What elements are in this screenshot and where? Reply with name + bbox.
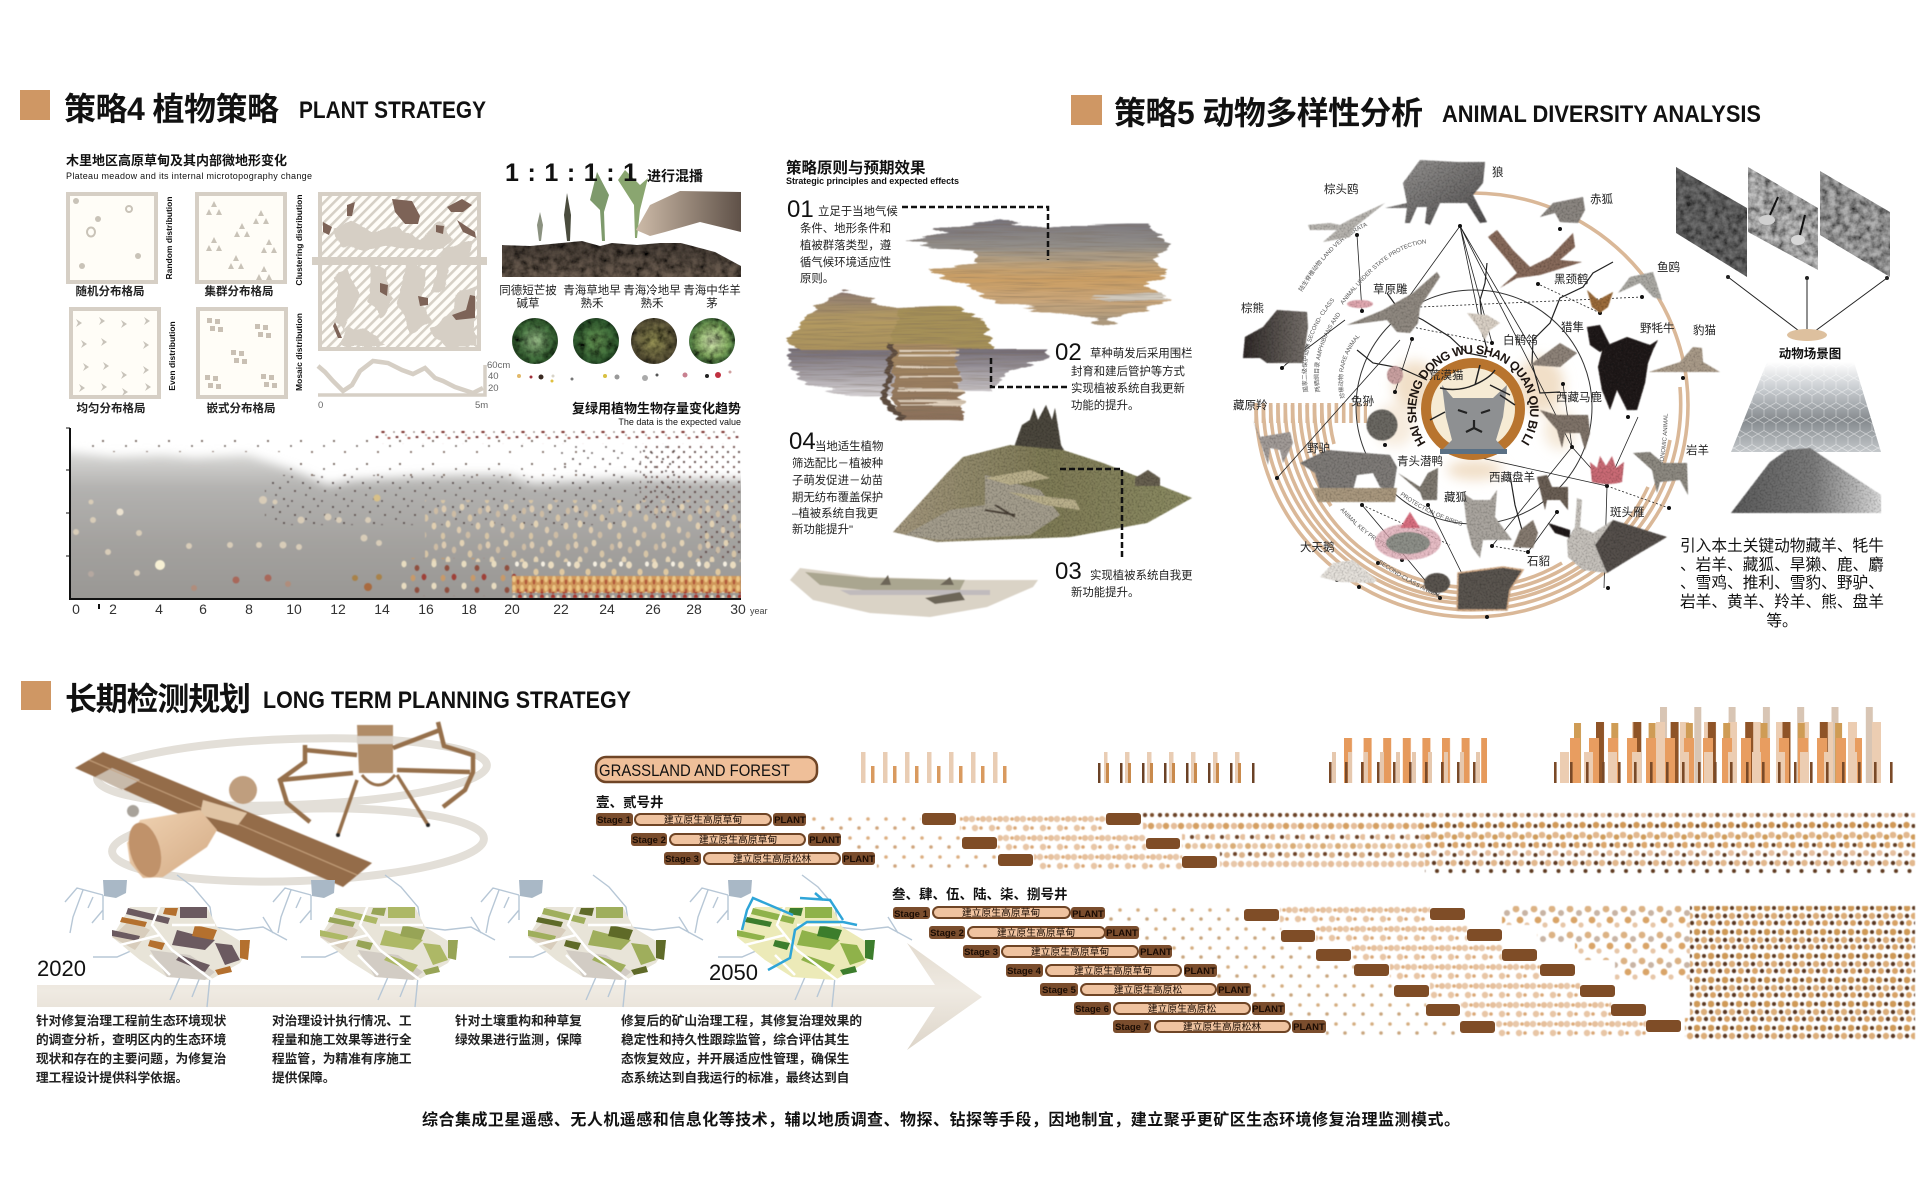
x axis labels: 2 bbox=[109, 601, 117, 617]
timeline arrow bbox=[37, 943, 982, 1050]
animal: baer's pochard bbox=[1398, 468, 1438, 500]
item 04: 期无纺布覆盖保护 bbox=[792, 490, 883, 504]
vertical labels: Even distribution bbox=[167, 321, 177, 391]
arc captions: ECONOMIC ANIMAL bbox=[1660, 414, 1668, 464]
arc captions: 珍稀动物 RARE ANIMAL bbox=[1338, 335, 1360, 399]
animal: saker falcon bbox=[1530, 343, 1577, 367]
stage 7 row bbox=[1113, 1020, 1681, 1033]
animal: argali bbox=[1537, 475, 1568, 510]
map 2020 bbox=[65, 875, 287, 1007]
chart title bbox=[572, 401, 741, 427]
animal labels: 荒漠猫 bbox=[1429, 369, 1464, 382]
stage 3 row: 建立原生高原草甸 bbox=[1031, 945, 1109, 958]
item 02: 实现植被系统自我更新 bbox=[1071, 381, 1185, 395]
item 01: 条件、地形条件和 bbox=[800, 221, 891, 235]
stage 7 row: 建立原生高原松林 bbox=[1183, 1020, 1261, 1033]
inner circle bbox=[1356, 290, 1592, 524]
stage 6 row: Stage 6 bbox=[1075, 1004, 1109, 1015]
animal labels: 草原雕 bbox=[1373, 282, 1408, 296]
arc captions: ANIMAL UNDER STATE PROTECTION bbox=[1340, 239, 1426, 305]
map stage 2 bbox=[273, 875, 495, 1007]
plant: pink flower bbox=[1590, 456, 1624, 484]
labels: four grass species: 碱草 bbox=[516, 297, 540, 310]
subtitle: plateau meadow: 木里地区高原草甸及其内部微地形变化 bbox=[66, 153, 287, 168]
stage 1 row: PLANT bbox=[1072, 909, 1104, 920]
network nodes bbox=[1275, 224, 1685, 619]
animal labels: 西藏盘羊 bbox=[1489, 470, 1535, 484]
animal: red fox bbox=[1540, 197, 1585, 223]
label: animal scene: 动物场景图 bbox=[1779, 346, 1841, 361]
ring: concentric habitat arcs bbox=[1254, 193, 1688, 617]
cream background blobs bbox=[1375, 357, 1576, 480]
text: step one: 理工程设计提供科学依据。 bbox=[36, 1070, 188, 1085]
stage 4 row: PLANT bbox=[1184, 966, 1216, 977]
arc captions: SECOND-CLASS ANIMAL bbox=[1378, 560, 1440, 598]
stage 1 row bbox=[596, 813, 1141, 826]
stage 2 row: 建立原生高原草甸 bbox=[997, 926, 1075, 939]
x axis labels: 0 bbox=[72, 601, 80, 617]
stage 2 row: Stage 2 bbox=[632, 835, 666, 846]
elevation profile: 60cm bbox=[487, 360, 510, 371]
arc captions: 两栖纲目录 AMPHIBIANS AND bbox=[1314, 312, 1340, 392]
animal labels: 野牦牛 bbox=[1640, 321, 1674, 335]
item 01: 循气候环境适应性 bbox=[800, 255, 891, 269]
connection lines bbox=[1277, 226, 1669, 598]
heading: plant strategy bbox=[20, 90, 486, 127]
animal: pallas cat bbox=[1366, 410, 1398, 440]
labels: four grass species: 茅 bbox=[706, 297, 718, 310]
x axis labels: 4 bbox=[155, 601, 163, 617]
landscape: stone path over water bbox=[787, 290, 1050, 422]
labels: four grass species bbox=[499, 283, 741, 310]
animal: tibetan gazelle bbox=[1253, 420, 1293, 465]
map 2050 bbox=[690, 875, 912, 1007]
stage 7 row: PLANT bbox=[1293, 1022, 1325, 1033]
stage 1 row: 建立原生高原草甸 bbox=[664, 813, 742, 826]
centre: ring and lynx bbox=[1426, 363, 1520, 455]
item 02: 02 bbox=[1055, 339, 1082, 366]
heading: animal diversity analysis: 策略5 动物多样性分析 bbox=[1114, 95, 1423, 131]
year 2020: 2020 bbox=[37, 956, 86, 981]
x axis labels: 26 bbox=[645, 601, 661, 617]
text: step one: 针对修复治理工程前生态环境现状 bbox=[36, 1013, 227, 1028]
subtitle: plateau meadow: Plateau meadow and its internal microtopography change bbox=[66, 171, 312, 181]
item 04: 当地适生植物 bbox=[815, 439, 883, 453]
animal labels bbox=[1233, 165, 1716, 568]
stage 1 row: Stage 1 bbox=[597, 815, 632, 826]
item 04: 新功能提升" bbox=[792, 522, 853, 536]
text: native animals: 、岩羊、藏狐、旱獭、鹿、麝 bbox=[1680, 556, 1884, 574]
plant: pink shrub bbox=[1375, 512, 1441, 560]
item 01: 立足于当地气候 bbox=[818, 204, 898, 218]
animal silhouettes bbox=[1243, 160, 1720, 610]
x axis labels: 14 bbox=[374, 601, 390, 617]
heading: 1:1:1:1 ratio: 进行混播 bbox=[647, 168, 703, 184]
vertical labels: Random distribution bbox=[164, 196, 174, 280]
animal: rabbit bbox=[1513, 520, 1538, 548]
text: step one: 现状和存在的主要问题，为修复治 bbox=[36, 1051, 227, 1066]
panel: grassland and forest schedule bbox=[596, 707, 1915, 1040]
chart title: 复绿用植物生物存量变化趋势 bbox=[572, 401, 741, 416]
photos: grass circles bbox=[512, 318, 735, 364]
stage 3 row: Stage 3 bbox=[665, 854, 699, 865]
stage 5 row: 建立原生高原松 bbox=[1114, 983, 1182, 996]
box: even distribution bbox=[71, 309, 159, 397]
stage 4 row bbox=[1006, 964, 1575, 977]
animal: whooper swan bbox=[1320, 560, 1377, 583]
stage 2 row: 建立原生高原草甸 bbox=[699, 833, 777, 846]
item 03: 实现植被系统自我更 bbox=[1090, 568, 1193, 582]
animal: wolf bbox=[1385, 160, 1487, 225]
item 02: 功能的提升。 bbox=[1071, 398, 1139, 412]
elevation profile: 5m bbox=[475, 400, 488, 411]
dashed connector 02 bbox=[991, 358, 1068, 387]
stage 5 row: Stage 5 bbox=[1042, 985, 1077, 996]
labels: four grass species: 熟禾 bbox=[640, 296, 664, 310]
bar group 2 bbox=[1098, 752, 1255, 783]
chart title: The data is the expected value bbox=[618, 417, 741, 427]
heading: long term planning: LONG TERM PLANNING STRATEGY bbox=[263, 687, 631, 714]
animal: pink fish bbox=[1347, 300, 1373, 308]
animal: egret bbox=[1467, 313, 1500, 340]
vertical labels: Clustering distribution bbox=[294, 194, 304, 286]
arc captions: 陆生脊椎动物 LAND VERTEBRATA bbox=[1298, 222, 1368, 292]
item 04: –植被系统自我更 bbox=[792, 506, 879, 520]
text: step four bbox=[621, 1013, 862, 1085]
stage rows: lower group bbox=[893, 906, 1681, 1033]
dashed connector 01 bbox=[902, 207, 1048, 260]
animal labels: 黑颈鹤 bbox=[1554, 272, 1588, 286]
animal labels: 赤狐 bbox=[1590, 192, 1613, 206]
animal: blue sheep bbox=[1633, 452, 1688, 495]
item 04 bbox=[789, 428, 883, 536]
labels: four grass species: 青海冷地早 bbox=[623, 283, 681, 297]
item 02 bbox=[1055, 339, 1193, 412]
landscape: grassland with trees bbox=[893, 405, 1192, 542]
animal: black-necked crane bbox=[1488, 230, 1582, 288]
pattern labels bbox=[76, 284, 276, 415]
dot matrix: upper group bbox=[808, 813, 1915, 873]
animal labels: 狼 bbox=[1492, 165, 1504, 179]
animal labels: 棕头鸥 bbox=[1324, 182, 1358, 196]
arc captions: ANIMAL KEY PROTECTION bbox=[1340, 508, 1402, 556]
animal labels: 猎隼 bbox=[1561, 320, 1584, 334]
animal labels: 大天鹅 bbox=[1300, 540, 1334, 554]
heading: plant strategy: PLANT STRATEGY bbox=[299, 97, 486, 124]
animal labels: 野驴 bbox=[1307, 441, 1330, 455]
stage 1 row: 建立原生高原草甸 bbox=[962, 906, 1040, 919]
heading: 1:1:1:1 ratio bbox=[505, 159, 703, 187]
stage 2 row: PLANT bbox=[809, 835, 841, 846]
x axis labels bbox=[72, 601, 768, 617]
text: native animals bbox=[1680, 537, 1884, 630]
text: step one bbox=[36, 1013, 227, 1085]
bar group 4 bbox=[1554, 707, 1895, 783]
stage 3 row: 建立原生高原松林 bbox=[733, 852, 811, 865]
arc captions bbox=[1298, 222, 1668, 598]
dashed connector 03 bbox=[1060, 469, 1122, 560]
animal: gull bbox=[1308, 203, 1385, 242]
stage 2 row bbox=[631, 833, 1180, 849]
item 04: 04 bbox=[789, 428, 816, 455]
subheading: principles: Strategic principles and expected effects bbox=[786, 176, 959, 186]
year 2050: 2050 bbox=[709, 960, 758, 985]
animal: steppe eagle bbox=[1347, 272, 1440, 333]
item 03: 新功能提升。 bbox=[1071, 585, 1139, 599]
text: step four: 修复后的矿山治理工程，其修复治理效果的 bbox=[621, 1013, 862, 1028]
animal: bar-headed goose bbox=[1548, 498, 1667, 573]
stage 3 row: Stage 3 bbox=[964, 947, 998, 958]
pattern labels: 嵌式分布格局 bbox=[206, 401, 276, 415]
arc captions: PROTECTION OF BIRDS bbox=[1400, 492, 1462, 526]
text: step one: 的调查分析，查明区内的生态环境 bbox=[36, 1032, 227, 1047]
animal: brown bear bbox=[1243, 310, 1308, 363]
title pill: GRASSLAND AND FOREST bbox=[599, 761, 790, 780]
animal labels: 藏原羚 bbox=[1233, 398, 1268, 412]
animal: pheasant bbox=[1387, 366, 1403, 384]
icon: drone bbox=[280, 722, 473, 837]
x axis labels: 16 bbox=[418, 601, 434, 617]
heading: long term planning: 长期检测规划 bbox=[65, 681, 251, 717]
stage 1 row: PLANT bbox=[774, 815, 806, 826]
stage 5 row: PLANT bbox=[1218, 985, 1250, 996]
box: random distribution bbox=[68, 194, 156, 282]
panel: seed mixing bbox=[499, 159, 741, 382]
animal labels: 棕熊 bbox=[1241, 301, 1264, 315]
x axis labels: 12 bbox=[330, 601, 346, 617]
item 03 bbox=[1055, 558, 1193, 599]
stage 1 row bbox=[893, 906, 1465, 921]
mosaic scene bbox=[1731, 362, 1881, 513]
animal labels: 斑头雁 bbox=[1610, 505, 1644, 519]
elevation profile: 40 bbox=[488, 371, 499, 382]
orbit rings bbox=[96, 732, 488, 887]
vertical labels: Mosaic distribution bbox=[294, 313, 304, 391]
stage rows: upper group bbox=[596, 813, 1217, 868]
stage 6 row bbox=[1074, 1002, 1646, 1016]
text: native animals: 引入本土关键动物藏羊、牦牛 bbox=[1680, 537, 1884, 555]
labels: four grass species: 青海中华羊 bbox=[683, 283, 741, 297]
projection base bbox=[1787, 329, 1827, 341]
panel: strategic principles bbox=[786, 158, 1193, 617]
landscape: panoramic crescent bbox=[790, 568, 1038, 617]
item 01: 植被群落类型，遵 bbox=[800, 238, 892, 252]
heading: long term planning bbox=[21, 681, 631, 717]
elevation profile bbox=[318, 360, 510, 411]
animal labels: 鱼鸥 bbox=[1657, 260, 1680, 274]
stage 2 row: Stage 2 bbox=[930, 928, 964, 939]
stage 2 row: PLANT bbox=[1106, 928, 1138, 939]
x axis labels: 22 bbox=[553, 601, 569, 617]
x axis labels: 8 bbox=[245, 601, 253, 617]
projection lines bbox=[1726, 276, 1888, 337]
x axis labels: 18 bbox=[461, 601, 477, 617]
text: step four: 态恢复效应，并开展适应性管理，确保生 bbox=[621, 1051, 850, 1066]
animal labels: 岩羊 bbox=[1686, 443, 1709, 457]
item 04: 筛选配比－植被种 bbox=[792, 456, 883, 470]
seed dots bbox=[517, 370, 732, 382]
text: step two: 对治理设计执行情况、工 bbox=[272, 1013, 412, 1028]
stage 2 row bbox=[929, 926, 1502, 942]
text: native animals: 、雪鸡、推利、雪豹、野驴、 bbox=[1680, 574, 1884, 592]
heading: animal diversity analysis: ANIMAL DIVERSITY ANALYSIS bbox=[1442, 101, 1761, 128]
text: step four: 稳定性和持久性跟踪监管，综合评估其生 bbox=[621, 1032, 850, 1047]
chart area bbox=[71, 430, 741, 598]
animal: badger bbox=[1457, 567, 1523, 610]
labels: four grass species: 青海草地早 bbox=[563, 283, 621, 297]
icon: satellite bbox=[75, 752, 372, 887]
x axis labels: 28 bbox=[686, 601, 702, 617]
heading: 1:1:1:1 ratio: 1 : 1 : 1 : 1 bbox=[505, 159, 637, 187]
text: step two: 程量和施工效果等进行全 bbox=[272, 1032, 412, 1047]
animal labels: 豹猫 bbox=[1693, 323, 1716, 337]
subtitle: plateau meadow bbox=[66, 153, 312, 181]
text: native animals: 岩羊、黄羊、羚羊、熊、盘羊 bbox=[1680, 592, 1884, 611]
dot matrix: lower group bbox=[1105, 904, 1915, 1040]
bar group 3 bbox=[1329, 738, 1487, 783]
item 01 bbox=[787, 196, 898, 285]
subheading: principles: 策略原则与预期效果 bbox=[786, 158, 926, 177]
labels: four grass species: 同德短芒披 bbox=[499, 283, 557, 297]
elevation profile: 20 bbox=[488, 383, 499, 394]
text: step three: 绿效果进行监测，保障 bbox=[455, 1032, 582, 1047]
animal labels: 兔狲 bbox=[1351, 394, 1374, 408]
stage 3 row: PLANT bbox=[843, 854, 875, 865]
panel: plateau meadow distribution bbox=[66, 153, 510, 415]
photo panels bbox=[1676, 167, 1890, 277]
animal: leopard cat bbox=[1649, 347, 1720, 372]
heading: plant strategy: 策略4 植物策略 bbox=[64, 91, 279, 127]
x axis labels: 6 bbox=[199, 601, 207, 617]
stage 5 row bbox=[1040, 983, 1615, 997]
labels: four grass species: 熟禾 bbox=[580, 296, 604, 310]
stage 3 row bbox=[963, 945, 1537, 961]
photo: seedlings and hand bbox=[502, 170, 741, 277]
animal labels: 西藏马鹿 bbox=[1556, 390, 1602, 404]
vertical labels bbox=[164, 194, 304, 391]
pattern labels: 集群分布格局 bbox=[204, 284, 274, 298]
item 03: 03 bbox=[1055, 558, 1082, 585]
animal: fish gull bbox=[1618, 272, 1662, 300]
animal labels: 白鹡鸰 bbox=[1503, 333, 1538, 347]
item 02: 草种萌发后采用围栏 bbox=[1090, 346, 1193, 360]
bar group 1 bbox=[861, 752, 1010, 783]
x axis labels: 10 bbox=[286, 601, 302, 617]
panel: monitoring timeline bbox=[36, 722, 1460, 1129]
animal: red deer bbox=[1540, 410, 1590, 450]
box: mosaic distribution bbox=[198, 309, 286, 397]
text: summary: 综合集成卫星遥感、无人机遥感和信息化等技术，辅以地质调查、物探、钻探等手段，因地制宜，建立聚乎更矿区生态环境修复治理监测模式。 bbox=[422, 1110, 1460, 1129]
panel: animal food web bbox=[1233, 159, 1720, 619]
text: step four: 态系统达到自我运行的标准，最终达到自 bbox=[621, 1070, 849, 1085]
panel: animal scene images bbox=[1676, 167, 1890, 630]
stage 6 row: PLANT bbox=[1252, 1004, 1284, 1015]
label: wells 1 and 2: 壹、贰号井 bbox=[596, 794, 664, 810]
text: step two bbox=[272, 1013, 412, 1085]
animal labels: 青头潜鸭 bbox=[1397, 454, 1443, 468]
item 02: 封育和建后管护等方式 bbox=[1071, 364, 1186, 378]
stage 1 row: Stage 1 bbox=[894, 909, 929, 920]
animal: tibetan fox bbox=[1463, 490, 1512, 558]
text: step three: 针对土壤重构和种草复 bbox=[455, 1013, 582, 1028]
panel: biomass trend chart bbox=[66, 402, 768, 616]
x axis labels: 20 bbox=[504, 601, 520, 617]
microtopography map bbox=[312, 194, 487, 349]
heading: animal diversity analysis bbox=[1071, 95, 1761, 131]
stage 7 row: Stage 7 bbox=[1115, 1022, 1149, 1033]
subheading: principles bbox=[786, 158, 959, 186]
item 04: 子萌发促进－幼苗 bbox=[792, 473, 883, 487]
stage 4 row: 建立原生高原草甸 bbox=[1074, 964, 1152, 977]
elevation profile: 0 bbox=[318, 400, 323, 411]
text: step two: 提供保障。 bbox=[272, 1070, 335, 1085]
pattern labels: 均匀分布格局 bbox=[76, 401, 146, 415]
animal: wild yak bbox=[1587, 325, 1658, 410]
stage 3 row: PLANT bbox=[1140, 947, 1172, 958]
landscape: mountain meadow bbox=[903, 218, 1172, 323]
box: clustering distribution bbox=[197, 194, 285, 282]
item 01: 原则。 bbox=[800, 272, 834, 285]
label: wells 3 to 8: 叁、肆、伍、陆、柒、捌号井 bbox=[892, 886, 1068, 902]
text: native animals: 等。 bbox=[1766, 612, 1798, 630]
stage 6 row: 建立原生高原松 bbox=[1148, 1002, 1216, 1015]
plant: dark shrub bbox=[1424, 573, 1450, 593]
x axis labels: 30 bbox=[730, 601, 746, 617]
animal labels: 石貂 bbox=[1527, 554, 1550, 568]
chart axes bbox=[66, 428, 741, 609]
animal: wild asses bbox=[1300, 450, 1397, 502]
text: step two: 程监管，为精准有序施工 bbox=[272, 1051, 412, 1066]
map stage 3 bbox=[481, 875, 703, 1007]
x axis labels: 24 bbox=[599, 601, 615, 617]
animal: butterfly bbox=[1587, 290, 1613, 313]
stage 4 row: Stage 4 bbox=[1007, 966, 1042, 977]
circular title text: HAI SHENG DONG WU SHAN QUAN QIU BI LI bbox=[1407, 345, 1539, 447]
x axis labels: year bbox=[750, 606, 768, 616]
text: step three bbox=[455, 1013, 582, 1047]
pattern labels: 随机分布格局 bbox=[76, 284, 144, 298]
stage 3 row bbox=[664, 852, 1217, 868]
arc captions: 国家二级保护动物 SECOND- CLASS bbox=[1302, 298, 1334, 392]
animal labels: 藏狐 bbox=[1444, 490, 1467, 504]
item 01: 01 bbox=[787, 196, 814, 223]
